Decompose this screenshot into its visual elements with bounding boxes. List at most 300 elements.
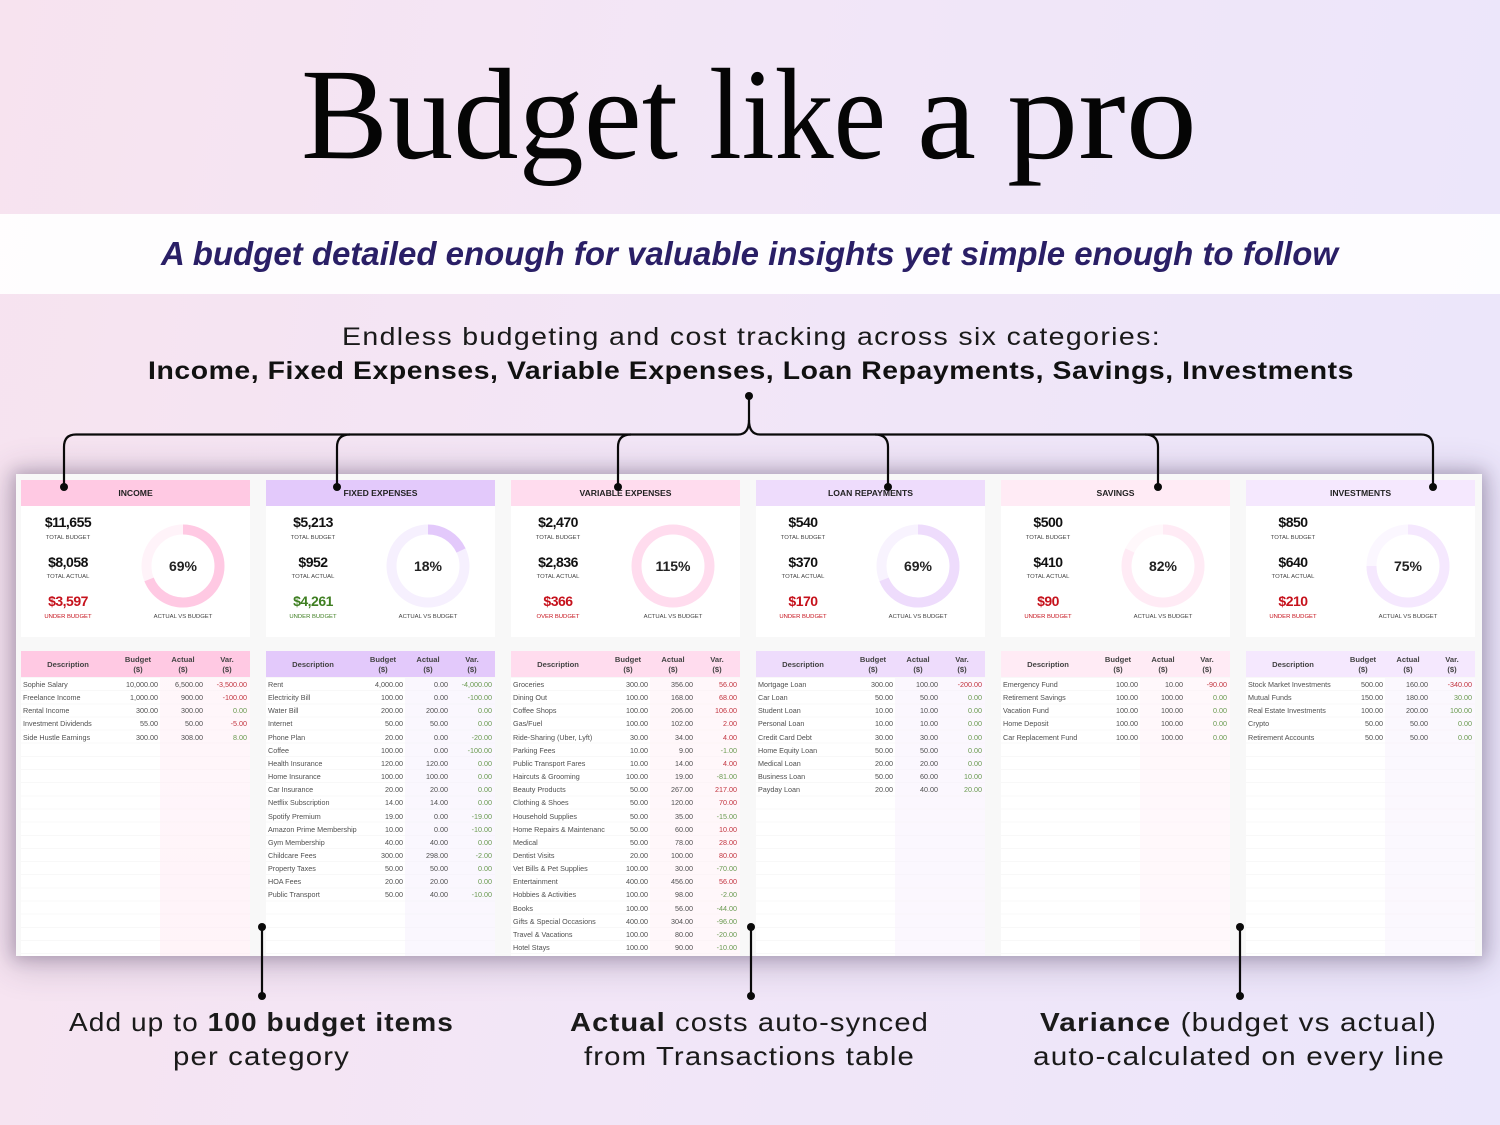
arrow: top bracket to six categories <box>60 392 1437 491</box>
fixed expenses table: 0.00 <box>478 864 492 873</box>
fixed expenses table: 100.00 <box>381 772 403 781</box>
loan repayments table: Business Loan <box>758 772 805 781</box>
loan repayments table: 40.00 <box>920 785 938 794</box>
variable expenses table: 304.00 <box>671 917 693 926</box>
loan repayments table: 0.00 <box>968 706 982 715</box>
loan repayments table: 10.00 <box>875 706 893 715</box>
variable expenses table: 34.00 <box>675 733 693 742</box>
loan repayments table header: Description <box>782 660 824 668</box>
variable expenses table: -70.00 <box>717 864 737 873</box>
investments table header <box>1246 651 1475 677</box>
savings summary card: $410 <box>1033 554 1063 570</box>
savings table: 100.00 <box>1116 693 1138 702</box>
variable expenses table header: Actual <box>661 655 685 664</box>
variable expenses table: 60.00 <box>675 825 693 834</box>
variable expenses table header: Budget <box>615 655 641 664</box>
variable expenses table: 78.00 <box>675 838 693 847</box>
loan repayments summary card: $540 <box>788 514 818 530</box>
variable expenses table: 28.00 <box>719 838 737 847</box>
loan repayments summary card: UNDER BUDGET <box>779 614 827 620</box>
investments table: 500.00 <box>1361 680 1383 689</box>
fixed expenses table: 50.00 <box>385 890 403 899</box>
variable expenses table: 100.00 <box>626 943 648 952</box>
savings table: 10.00 <box>1165 680 1183 689</box>
loan repayments table: 20.00 <box>875 785 893 794</box>
variable expenses table: Household Supplies <box>513 812 577 820</box>
investments table header: ($) <box>1358 665 1368 674</box>
savings table header: ($) <box>1202 665 1212 674</box>
fixed expenses table: 14.00 <box>430 798 448 807</box>
fixed expenses table: 0.00 <box>478 798 492 807</box>
loan repayments table header: ($) <box>913 665 923 674</box>
income table header: ($) <box>178 665 188 674</box>
variable expenses summary card: $366 <box>543 593 573 609</box>
fixed expenses table: 19.00 <box>385 812 403 820</box>
loan repayments table header: ($) <box>868 665 878 674</box>
savings table: 100.00 <box>1116 706 1138 715</box>
income summary card: $3,597 <box>48 593 88 609</box>
loan repayments table: Home Equity Loan <box>758 746 817 755</box>
investments table: Retirement Accounts <box>1248 733 1314 742</box>
income table: Rental Income <box>23 706 69 715</box>
fixed expenses table: 120.00 <box>426 759 448 768</box>
subtitle: A budget detailed enough for valuable insights yet simple enough to follow <box>160 235 1340 272</box>
investments summary card: $210 <box>1278 593 1308 609</box>
variable expenses summary card <box>511 506 740 637</box>
investments table: 150.00 <box>1361 693 1383 702</box>
variable expenses table: Coffee Shops <box>513 706 556 715</box>
variable expenses table: Dentist Visits <box>513 851 554 860</box>
savings table: Retirement Savings <box>1003 693 1066 702</box>
loan repayments table: Credit Card Debt <box>758 733 812 742</box>
fixed expenses table: 20.00 <box>430 877 448 886</box>
loan repayments table header: Budget <box>860 655 886 664</box>
loan repayments table: Mortgage Loan <box>758 680 806 689</box>
fixed expenses table: 0.00 <box>478 759 492 768</box>
panel: variable expenses <box>511 480 740 952</box>
fixed expenses table: Health Insurance <box>268 759 322 768</box>
loan repayments table: 10.00 <box>920 706 938 715</box>
caption: variance: auto-calculated on every line <box>1033 1041 1445 1071</box>
fixed expenses summary card <box>266 506 495 637</box>
income table header: Description <box>47 660 89 668</box>
loan repayments table: 10.00 <box>964 772 982 781</box>
variable expenses table: 356.00 <box>671 680 693 689</box>
loan repayments table header: ($) <box>957 665 967 674</box>
variable expenses table: Hotel Stays <box>513 943 550 952</box>
loan repayments table: 0.00 <box>968 759 982 768</box>
fixed expenses table: -10.00 <box>472 890 492 899</box>
loan repayments summary card: $170 <box>788 593 818 609</box>
savings table: 100.00 <box>1161 719 1183 728</box>
variable expenses table: Beauty Products <box>513 785 566 794</box>
savings summary card: 82% <box>1149 558 1178 574</box>
loan repayments table: 0.00 <box>968 719 982 728</box>
variable expenses table: -96.00 <box>717 917 737 926</box>
fixed expenses table: Rent <box>268 680 283 689</box>
income table: Investment Dividends <box>23 719 92 728</box>
income table: -5.00 <box>231 719 247 728</box>
fixed expenses table: Car Insurance <box>268 785 313 794</box>
loan repayments table: 50.00 <box>920 746 938 755</box>
fixed expenses summary card: ACTUAL VS BUDGET <box>399 614 457 620</box>
income table: 0.00 <box>233 706 247 715</box>
investments summary card: UNDER BUDGET <box>1269 614 1317 620</box>
income summary card: UNDER BUDGET <box>44 614 92 620</box>
fixed expenses table: 40.00 <box>430 890 448 899</box>
income table: Sophie Salary <box>23 680 68 689</box>
investments summary card: TOTAL BUDGET <box>1271 535 1315 541</box>
fixed expenses table: 50.00 <box>430 719 448 728</box>
variable expenses table: 14.00 <box>675 759 693 768</box>
fixed expenses table: -19.00 <box>472 812 492 820</box>
savings table header: ($) <box>1158 665 1168 674</box>
variable expenses table: Books <box>513 904 533 913</box>
loan repayments table: 100.00 <box>916 680 938 689</box>
variable expenses table: Ride-Sharing (Uber, Lyft) <box>513 733 592 742</box>
investments table: 50.00 <box>1365 719 1383 728</box>
fixed expenses table: Public Transport <box>268 890 320 899</box>
investments table: Mutual Funds <box>1248 693 1292 702</box>
variable expenses table: 4.00 <box>723 733 737 742</box>
loan repayments table: 20.00 <box>875 759 893 768</box>
intro line: Endless budgeting and cost tracking across six categories: <box>342 323 1161 351</box>
investments table header: ($) <box>1403 665 1413 674</box>
investments table: 100.00 <box>1450 706 1472 715</box>
fixed expenses table: 20.00 <box>385 877 403 886</box>
title: a <box>917 43 976 187</box>
variable expenses table: Dining Out <box>513 693 547 702</box>
variable expenses table: 20.00 <box>630 851 648 860</box>
variable expenses table: 10.00 <box>630 746 648 755</box>
variable expenses table: 35.00 <box>675 812 693 820</box>
variable expenses heading: VARIABLE EXPENSES <box>579 488 672 498</box>
income table header <box>21 651 250 677</box>
income table header: Actual <box>171 655 195 664</box>
loan repayments table: Payday Loan <box>758 785 800 794</box>
investments table: 100.00 <box>1361 706 1383 715</box>
variable expenses table: 9.00 <box>679 746 693 755</box>
loan repayments summary card: 69% <box>904 558 933 574</box>
investments table: 200.00 <box>1406 706 1428 715</box>
fixed expenses table: 50.00 <box>430 864 448 873</box>
fixed expenses table header: ($) <box>423 665 433 674</box>
fixed expenses table header: Budget <box>370 655 396 664</box>
fixed expenses table: -2.00 <box>476 851 492 860</box>
title: Budget <box>301 43 678 187</box>
investments table: 30.00 <box>1454 693 1472 702</box>
fixed expenses table: 0.00 <box>478 785 492 794</box>
savings summary card <box>1001 506 1230 637</box>
fixed expenses table: -10.00 <box>472 825 492 834</box>
variable expenses table: -20.00 <box>717 930 737 939</box>
caption: actual costs <box>570 1007 929 1071</box>
loan repayments table: 20.00 <box>920 759 938 768</box>
investments summary card: ACTUAL VS BUDGET <box>1379 614 1437 620</box>
variable expenses table: 90.00 <box>675 943 693 952</box>
fixed expenses table: 100.00 <box>426 772 448 781</box>
variable expenses table: -15.00 <box>717 812 737 820</box>
arrow: variance pointer <box>1236 923 1244 1000</box>
fixed expenses table: Home Insurance <box>268 772 321 781</box>
savings table header: Actual <box>1151 655 1175 664</box>
investments table <box>1246 678 1475 956</box>
variable expenses table: Public Transport Fares <box>513 759 585 768</box>
fixed expenses table: Property Taxes <box>268 864 316 873</box>
loan repayments table: 50.00 <box>875 772 893 781</box>
variable expenses table: 50.00 <box>630 812 648 820</box>
investments table header: Actual <box>1396 655 1420 664</box>
fixed expenses table: 20.00 <box>385 733 403 742</box>
fixed expenses table: Gym Membership <box>268 838 325 847</box>
investments summary card: TOTAL ACTUAL <box>1272 574 1314 580</box>
caption: variance <box>1033 1007 1445 1071</box>
investments table: 160.00 <box>1406 680 1428 689</box>
fixed expenses table header: ($) <box>378 665 388 674</box>
variable expenses table: 100.00 <box>626 706 648 715</box>
savings table header: ($) <box>1113 665 1123 674</box>
variable expenses table: 300.00 <box>626 680 648 689</box>
variable expenses table: 100.00 <box>626 772 648 781</box>
variable expenses table: Vet Bills & Pet Supplies <box>513 864 588 873</box>
fixed expenses table: 300.00 <box>381 851 403 860</box>
fixed expenses table header <box>266 651 495 677</box>
loan repayments table <box>756 678 985 956</box>
income table header: Budget <box>125 655 151 664</box>
variable expenses table: -81.00 <box>717 772 737 781</box>
title <box>301 43 1197 187</box>
variable expenses table: 102.00 <box>671 719 693 728</box>
variable expenses table header: Description <box>537 660 579 668</box>
loan repayments table header: Var. <box>955 655 969 664</box>
variable expenses table: Hobbies & Activities <box>513 890 576 899</box>
loan repayments table: 50.00 <box>875 693 893 702</box>
loan repayments table: 50.00 <box>875 746 893 755</box>
subtitle strip <box>0 214 1500 294</box>
variable expenses table: 456.00 <box>671 877 693 886</box>
income table header: Var. <box>220 655 234 664</box>
investments table: 0.00 <box>1458 719 1472 728</box>
savings table: 100.00 <box>1161 706 1183 715</box>
variable expenses table: -10.00 <box>717 943 737 952</box>
investments table: Stock Market Investments <box>1248 680 1331 689</box>
loan repayments table: Medical Loan <box>758 759 801 768</box>
fixed expenses table: 4,000.00 <box>375 680 403 689</box>
savings table: 0.00 <box>1213 706 1227 715</box>
fixed expenses table: 0.00 <box>478 838 492 847</box>
variable expenses table: Entertainment <box>513 877 558 886</box>
income table: 900.00 <box>181 693 203 702</box>
panel: savings <box>1001 480 1230 742</box>
fixed expenses table: 0.00 <box>434 812 448 820</box>
fixed expenses table: 0.00 <box>478 877 492 886</box>
fixed expenses table: -100.00 <box>468 746 492 755</box>
variable expenses table header <box>511 651 740 677</box>
loan repayments table: -200.00 <box>958 680 982 689</box>
fixed expenses table: 0.00 <box>434 733 448 742</box>
savings table: Car Replacement Fund <box>1003 733 1077 742</box>
variable expenses table: 106.00 <box>715 706 737 715</box>
fixed expenses table: 0.00 <box>478 706 492 715</box>
variable expenses table: Gifts & Special Occasions <box>513 917 596 926</box>
fixed expenses table: 100.00 <box>381 746 403 755</box>
title: pro <box>1007 43 1197 187</box>
spreadsheet panel <box>16 474 1482 956</box>
variable expenses table: 100.00 <box>626 693 648 702</box>
variable expenses table: -1.00 <box>721 746 737 755</box>
fixed expenses table: HOA Fees <box>268 877 301 886</box>
savings table: Emergency Fund <box>1003 680 1058 689</box>
income summary card: $8,058 <box>48 554 88 570</box>
loan repayments table: 30.00 <box>920 733 938 742</box>
savings table: 0.00 <box>1213 719 1227 728</box>
fixed expenses summary card: $5,213 <box>293 514 333 530</box>
income table header: ($) <box>133 665 143 674</box>
fixed expenses table <box>266 678 495 956</box>
income table: Freelance Income <box>23 693 81 702</box>
investments table header: Budget <box>1350 655 1376 664</box>
loan repayments table: Car Loan <box>758 693 788 702</box>
fixed expenses table: Electricity Bill <box>268 693 310 702</box>
income summary card: TOTAL BUDGET <box>46 535 90 541</box>
savings table header: Var. <box>1200 655 1214 664</box>
investments table: -340.00 <box>1448 680 1472 689</box>
variable expenses table: 100.00 <box>626 930 648 939</box>
fixed expenses table: Phone Plan <box>268 733 305 742</box>
loan repayments heading <box>756 480 985 506</box>
fixed expenses table: Spotify Premium <box>268 812 321 820</box>
variable expenses summary card: TOTAL BUDGET <box>536 535 580 541</box>
savings table: 100.00 <box>1116 733 1138 742</box>
income table: Side Hustle Earnings <box>23 733 90 742</box>
caption: budget items <box>69 1007 454 1071</box>
loan repayments summary card: TOTAL BUDGET <box>781 535 825 541</box>
fixed expenses table: 20.00 <box>385 785 403 794</box>
income summary card: $11,655 <box>45 514 91 530</box>
fixed expenses table header: Description <box>292 660 334 668</box>
savings table <box>1001 678 1230 956</box>
variable expenses table: Home Repairs & Maintenanc <box>513 825 605 834</box>
investments summary card: 75% <box>1394 558 1423 574</box>
variable expenses table: 68.00 <box>719 693 737 702</box>
variable expenses table: Haircuts & Grooming <box>513 772 580 781</box>
variable expenses table: 50.00 <box>630 825 648 834</box>
investments summary card: $640 <box>1278 554 1308 570</box>
savings table: 100.00 <box>1116 680 1138 689</box>
savings heading: SAVINGS <box>1096 488 1135 498</box>
variable expenses table: 100.00 <box>626 864 648 873</box>
income table <box>21 678 250 956</box>
income heading: INCOME <box>118 488 153 498</box>
fixed expenses summary card: $4,261 <box>293 593 333 609</box>
income table: 6,500.00 <box>175 680 203 689</box>
variable expenses table: 80.00 <box>719 851 737 860</box>
fixed expenses table: 200.00 <box>426 706 448 715</box>
income table: 50.00 <box>185 719 203 728</box>
savings table header: Budget <box>1105 655 1131 664</box>
arrow: actual pointer <box>747 923 755 1000</box>
savings table header: Description <box>1027 660 1069 668</box>
savings table: 100.00 <box>1161 693 1183 702</box>
variable expenses table: Medical <box>513 838 538 847</box>
caption: variance: Variance (budget vs actual) <box>1040 1007 1437 1037</box>
variable expenses table header: Var. <box>710 655 724 664</box>
fixed expenses table: 40.00 <box>430 838 448 847</box>
income summary card <box>21 506 250 637</box>
variable expenses table: -2.00 <box>721 890 737 899</box>
caption: budget items: per category <box>173 1041 350 1071</box>
fixed expenses heading <box>266 480 495 506</box>
income table header: ($) <box>222 665 232 674</box>
loan repayments table: 0.00 <box>968 746 982 755</box>
fixed expenses table: 100.00 <box>381 693 403 702</box>
variable expenses table: 98.00 <box>675 890 693 899</box>
fixed expenses table: 10.00 <box>385 825 403 834</box>
variable expenses table: 56.00 <box>719 680 737 689</box>
variable expenses table: 400.00 <box>626 917 648 926</box>
savings summary card: TOTAL BUDGET <box>1026 535 1070 541</box>
income table: 1,000.00 <box>130 693 158 702</box>
investments heading <box>1246 480 1475 506</box>
variable expenses table header: ($) <box>712 665 722 674</box>
investments table header: ($) <box>1447 665 1457 674</box>
savings summary card: UNDER BUDGET <box>1024 614 1072 620</box>
loan repayments table header <box>756 651 985 677</box>
savings table header <box>1001 651 1230 677</box>
caption: budget items: Add up to 100 budget items <box>69 1007 454 1037</box>
fixed expenses table: 0.00 <box>434 825 448 834</box>
variable expenses table: 217.00 <box>715 785 737 794</box>
title: like <box>709 43 886 187</box>
loan repayments table: Student Loan <box>758 706 801 715</box>
variable expenses table: 4.00 <box>723 759 737 768</box>
fixed expenses table: 40.00 <box>385 838 403 847</box>
loan repayments table header: Actual <box>906 655 930 664</box>
savings table: -90.00 <box>1207 680 1227 689</box>
variable expenses table: 2.00 <box>723 719 737 728</box>
variable expenses table <box>511 678 740 956</box>
fixed expenses summary card: 18% <box>414 558 443 574</box>
investments table: 180.00 <box>1406 693 1428 702</box>
investments table: Crypto <box>1248 719 1269 728</box>
savings summary card: $500 <box>1033 514 1063 530</box>
variable expenses summary card: $2,836 <box>538 554 578 570</box>
variable expenses table: 400.00 <box>626 877 648 886</box>
variable expenses table: 56.00 <box>675 904 693 913</box>
fixed expenses table header: Var. <box>465 655 479 664</box>
variable expenses table: 168.00 <box>671 693 693 702</box>
variable expenses table: Groceries <box>513 680 544 689</box>
fixed expenses heading: FIXED EXPENSES <box>343 488 418 498</box>
income summary card: 69% <box>169 558 198 574</box>
income table: 300.00 <box>181 706 203 715</box>
savings table: Home Deposit <box>1003 719 1049 728</box>
fixed expenses table header: Actual <box>416 655 440 664</box>
investments table header: Var. <box>1445 655 1459 664</box>
variable expenses table: 50.00 <box>630 798 648 807</box>
caption: actual costs: from Transactions table <box>584 1041 915 1071</box>
fixed expenses table: 120.00 <box>381 759 403 768</box>
variable expenses table: 10.00 <box>719 825 737 834</box>
loan repayments table: 0.00 <box>968 733 982 742</box>
variable expenses table: 19.00 <box>675 772 693 781</box>
fixed expenses table: 200.00 <box>381 706 403 715</box>
loan repayments table: 300.00 <box>871 680 893 689</box>
loan repayments table: 10.00 <box>875 719 893 728</box>
panel: investments <box>1246 480 1475 742</box>
variable expenses summary card: ACTUAL VS BUDGET <box>644 614 702 620</box>
loan repayments heading: LOAN REPAYMENTS <box>828 488 913 498</box>
